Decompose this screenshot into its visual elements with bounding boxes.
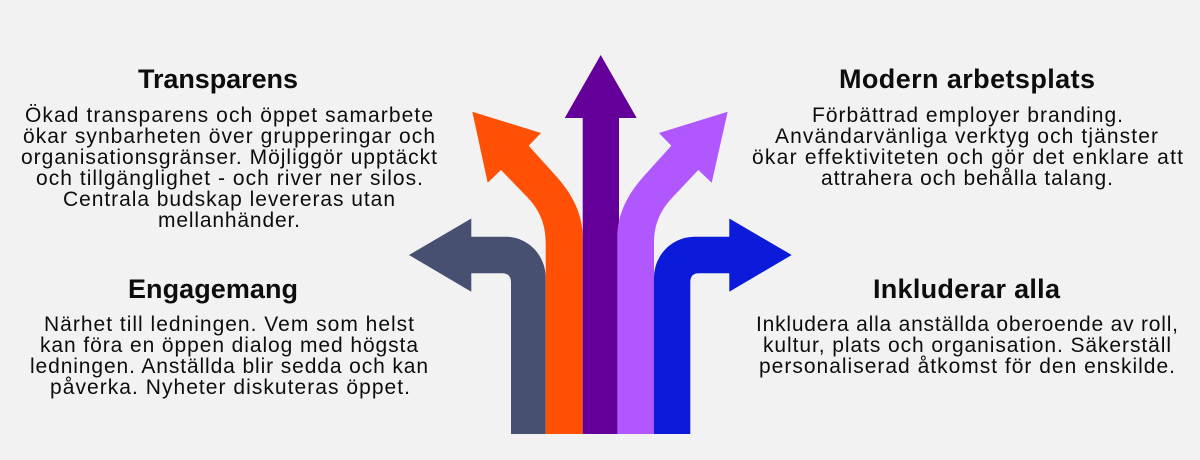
arrow: grey left (409, 218, 546, 434)
panel: Engagemang (30, 274, 428, 399)
text block: Modern arbetsplats body: ökar effektiviteten och gör det enklare att (752, 146, 1183, 169)
text block: Modern arbetsplats body: attrahera och behålla talang. (821, 167, 1113, 190)
text block: Inkluderar alla body (756, 313, 1178, 378)
text block: Modern arbetsplats body (752, 104, 1183, 190)
arrow: blue right (654, 218, 792, 434)
arrows diagram (409, 55, 792, 434)
panel: Modern arbetsplats (752, 64, 1183, 190)
heading: Transparens: Transparens (138, 64, 298, 94)
text block: Transparens body: mellanhänder. (158, 209, 300, 232)
panel: Inkluderar alla (756, 274, 1178, 378)
text block: Transparens body: ökar synbarheten över grupperingar och (23, 125, 435, 148)
text block: Engagemang body: ledningen. Anställda blir sedda och kan (30, 355, 428, 378)
text block: Transparens body (21, 104, 437, 232)
text block: Engagemang body: Närhet till ledningen. Vem som helst (44, 313, 414, 336)
text block: Engagemang body (30, 313, 428, 399)
text block: Engagemang body: kan föra en öppen dialog med högsta (40, 334, 418, 357)
text block: Transparens body: Centrala budskap levereras utan (63, 188, 395, 211)
heading: Inkluderar alla: Inkluderar alla (873, 274, 1061, 304)
panel: Transparens (21, 64, 437, 232)
text block: Inkluderar alla body: Inkludera alla anställda oberoende av roll, (756, 313, 1178, 336)
heading: Modern arbetsplats: Modern arbetsplats (839, 64, 1095, 94)
arrow: light purple up-right (617, 112, 728, 434)
text block: Transparens body: organisationsgränser. Möjliggör upptäckt (21, 146, 437, 169)
text block: Transparens body: och tillgänglighet - och river ner silos. (36, 167, 423, 190)
arrow: orange up-left (472, 112, 583, 434)
text block: Transparens body: Ökad transparens och öppet samarbete (25, 104, 433, 127)
text block: Inkluderar alla body: kultur, plats och organisation. Säkerställ (763, 334, 1171, 357)
heading: Engagemang: Engagemang (128, 274, 298, 304)
text block: Engagemang body: påverka. Nyheter diskuteras öppet. (50, 376, 410, 399)
text block: Modern arbetsplats body: Förbättrad employer branding. (812, 104, 1123, 127)
text block: Inkluderar alla body: personaliserad åtkomst för den enskilde. (759, 355, 1175, 378)
arrow: dark purple up (565, 55, 637, 434)
text block: Modern arbetsplats body: Användarvänliga verktyg och tjänster (775, 125, 1158, 148)
